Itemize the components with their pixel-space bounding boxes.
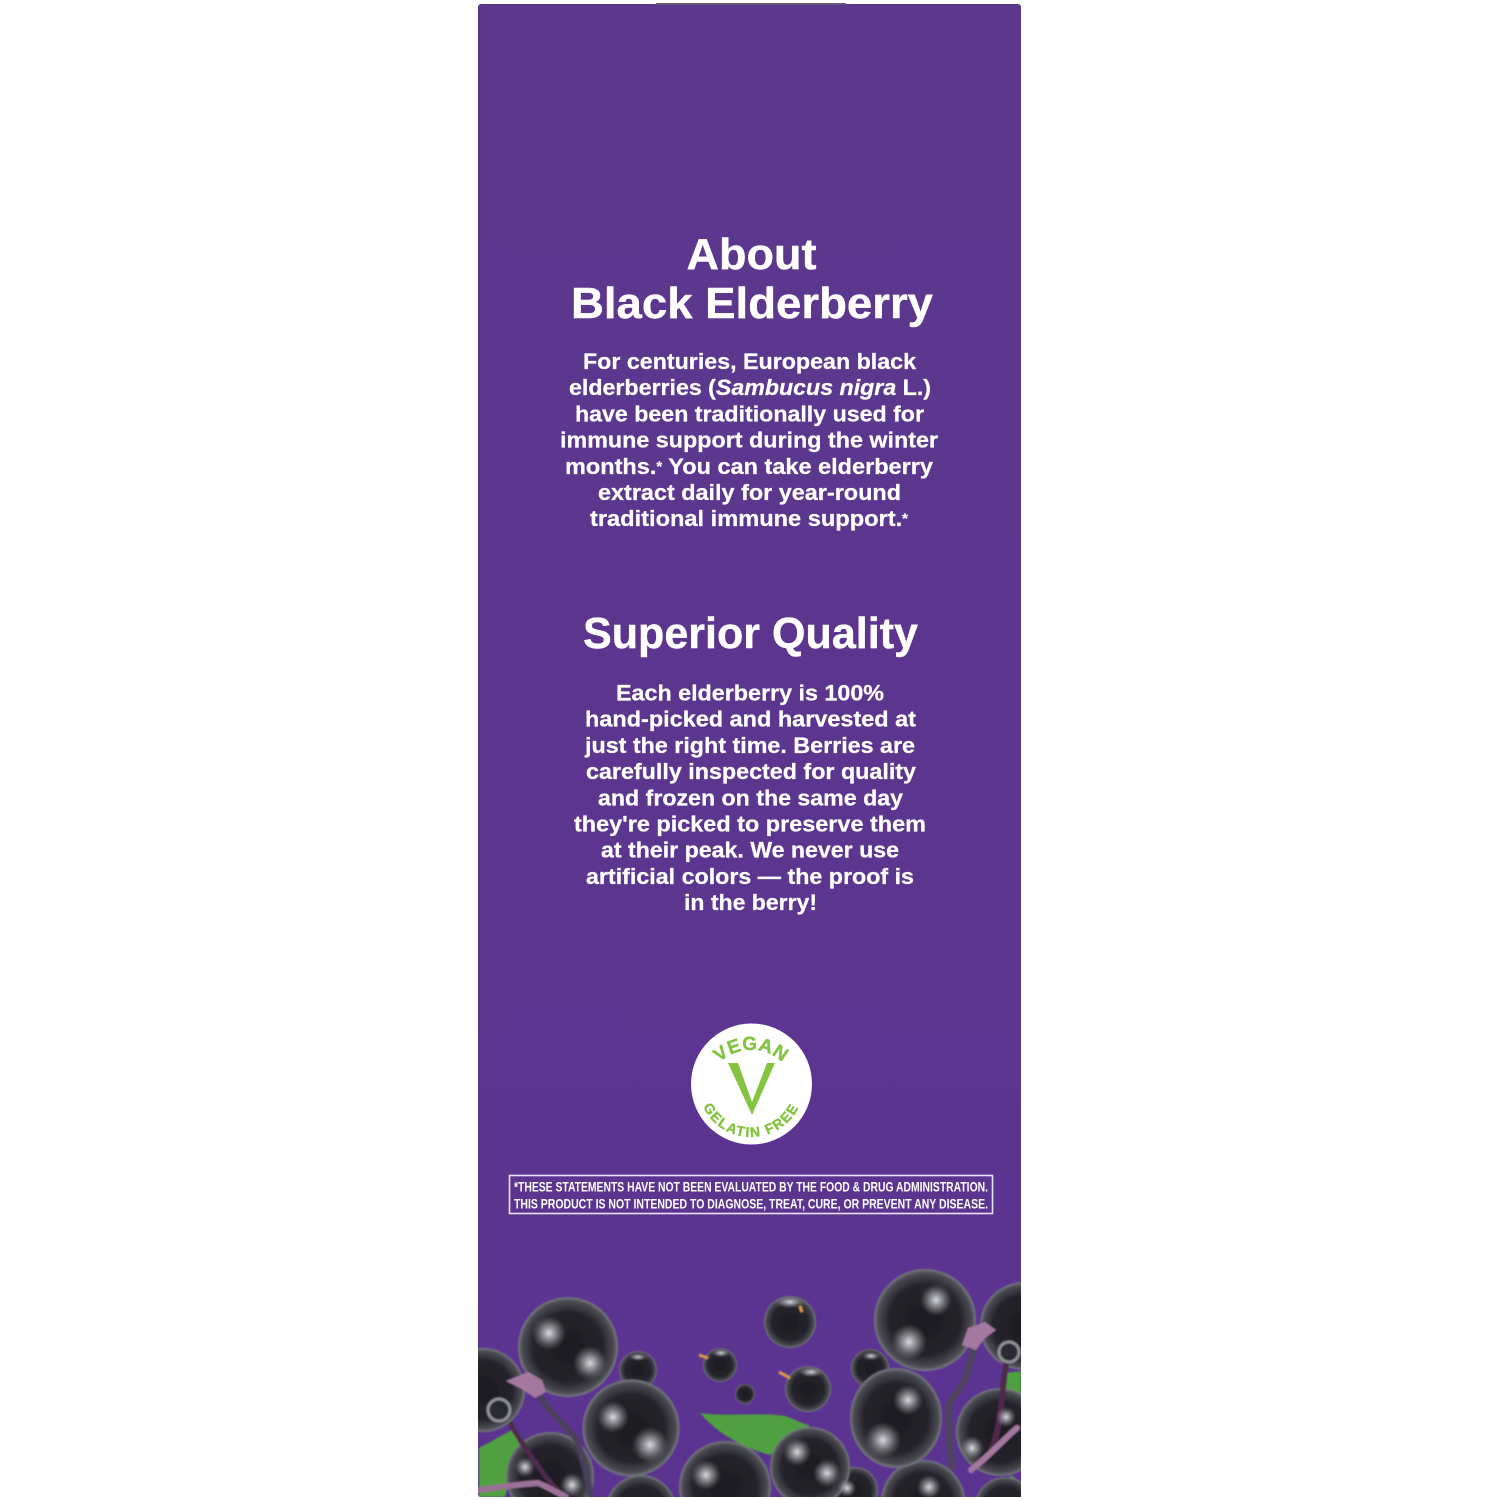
text block: superior quality: Each elderberry is 100%	[616, 680, 884, 706]
text block: about elderberry: For centuries, European black	[583, 349, 917, 374]
text block: superior quality: just the right time. Berries are	[584, 733, 915, 758]
text block: about elderberry: immune support during the winter	[560, 428, 938, 453]
disclaimer box: *THESE STATEMENTS HAVE NOT BEEN EVALUATED BY THE FOOD & DRUG ADMINISTRATION.	[514, 1178, 988, 1194]
large and floating berries	[441, 1269, 976, 1500]
heading: About Black Elderberry: Black Elderberry	[571, 279, 934, 328]
text block: superior quality: they're picked to preserve them	[574, 812, 926, 836]
heading: Superior Quality: Superior Quality	[583, 609, 919, 658]
text block: about elderberry: extract daily for year-round	[598, 480, 901, 505]
text block: about elderberry: You can take elderberry	[662, 454, 934, 479]
text block: about elderberry: have been traditionally used for	[575, 401, 924, 426]
text block: about elderberry: *	[902, 510, 909, 526]
berry calyx rings and stem tips	[488, 1306, 1019, 1421]
heading: About Black Elderberry: About	[686, 230, 817, 279]
text block: superior quality: and frozen on the same day	[598, 785, 904, 810]
background berries	[506, 1282, 1068, 1500]
disclaimer box	[510, 1176, 992, 1214]
text block: about elderberry: elderberries ( Sambucus nigra L.)	[569, 375, 931, 400]
text block: superior quality: at their peak. We never use	[601, 838, 899, 863]
text block: superior quality	[574, 680, 926, 915]
leaves	[479, 1371, 1021, 1497]
disclaimer box: THIS PRODUCT IS NOT INTENDED TO DIAGNOSE, TREAT, CURE, OR PREVENT ANY DISEASE.	[514, 1196, 988, 1212]
text block: about elderberry: *	[656, 458, 663, 474]
illustration: elderberries and leaves	[478, 1268, 1021, 1497]
icon: vegan gelatin free badge: GELATIN FREE	[704, 1104, 798, 1138]
text block: superior quality: hand-picked and harvested at	[585, 707, 917, 732]
text block: about elderberry: months.	[565, 454, 651, 479]
berry highlights	[515, 1284, 1016, 1499]
text block: superior quality: carefully inspected for quality	[586, 759, 917, 784]
stems	[479, 1332, 1017, 1497]
berry artwork group	[478, 1268, 1021, 1497]
heading: About Black Elderberry	[571, 230, 934, 328]
top edge shadow	[656, 3, 846, 4]
text block: about elderberry: traditional immune support.	[590, 506, 881, 531]
icon: vegan gelatin free badge: VEGAN	[712, 1036, 790, 1062]
text block: about elderberry	[560, 349, 938, 531]
text block: superior quality: artificial colors — the proof is	[586, 864, 914, 889]
panel: purple background	[478, 4, 1021, 1497]
icon: vegan gelatin free badge	[691, 1024, 812, 1144]
text block: superior quality: in the berry!	[684, 890, 817, 915]
